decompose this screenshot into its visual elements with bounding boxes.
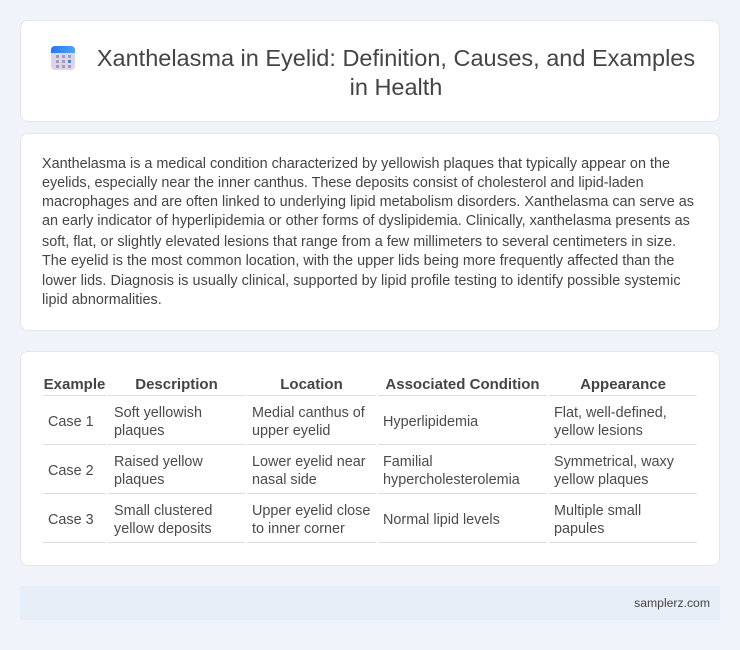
table row: case 3: Small clustered [114, 503, 212, 519]
table row: case 2: plaques [114, 472, 164, 488]
footer text: samplerz.com [634, 596, 710, 610]
heading: in Health [350, 74, 442, 100]
table row: case 1: Soft yellowish [114, 405, 202, 421]
table row: case 1: upper eyelid [252, 423, 330, 439]
footer bar [20, 586, 720, 620]
heading: Xanthelasma in Eyelid: Definition, Causes, and Examples [97, 45, 695, 71]
panel: title [20, 20, 720, 122]
text block: definition: lipid abnormalities. [42, 292, 162, 308]
table row: case 3: to inner corner [252, 521, 345, 537]
table row: case 1: Hyperlipidemia [383, 414, 478, 430]
text block: definition: lower lids. Diagnosis is usually clinical, supported by lipid profile testing to identify possible systemic [42, 273, 681, 289]
panel: examples table [20, 351, 720, 566]
text block: definition: macrophages and are often linked to underlying lipid metabolism disorders. Xanthelasma can serve as [42, 194, 694, 210]
table header: Associated Condition [385, 376, 540, 393]
table row: case 1: Flat, well-defined, [554, 405, 667, 421]
table row: case 3: papules [554, 521, 604, 537]
table row: case 1: Case 1 [48, 414, 94, 430]
table header: Appearance [580, 376, 666, 393]
table header: Location [280, 376, 343, 393]
text block: definition: Xanthelasma is a medical condition characterized by yellowish plaques that typically appear on the [42, 156, 670, 172]
table row: case 1: yellow lesions [554, 423, 643, 439]
table header: Example [44, 376, 105, 393]
table row: case 2: nasal side [252, 472, 317, 488]
text block: definition: eyelids, especially near the inner canthus. These deposits consist of cholesterol and lipid-laden [42, 175, 644, 191]
table row: case 2: Symmetrical, waxy [554, 454, 674, 470]
table row: case 2: Familial [383, 454, 433, 470]
table row: case 3: Case 3 [48, 512, 94, 528]
icon: calendar [51, 46, 75, 70]
table row: case 2: yellow plaques [554, 472, 648, 488]
text block: definition [42, 156, 694, 308]
table row: case 1: plaques [114, 423, 164, 439]
table row: case 3 [43, 503, 697, 543]
panel: definition paragraph [20, 133, 720, 331]
table row: case 1: Medial canthus of [252, 405, 365, 421]
table row: case 3: Normal lipid levels [383, 512, 500, 528]
table row: case 1 [43, 405, 697, 445]
table header: Description [135, 376, 218, 393]
table row: case 3: yellow deposits [114, 521, 212, 537]
table row: case 2: Lower eyelid near [252, 454, 366, 470]
text block: definition: soft, flat, or slightly elevated lesions that range from a few millimeters to several centimeters in size. [42, 234, 676, 250]
table header [43, 376, 697, 396]
text block: definition: The eyelid is the most common location, with the upper lids being more frequently affected than the [42, 253, 674, 269]
table row: case 2: Raised yellow [114, 454, 203, 470]
table row: case 2: hypercholesterolemia [383, 472, 520, 488]
table row: case 3: Upper eyelid close [252, 503, 370, 519]
table row: case 3: Multiple small [554, 503, 641, 519]
table row: case 2 [43, 454, 697, 494]
heading [97, 45, 695, 100]
table row: case 2: Case 2 [48, 463, 94, 479]
text block: definition: an early indicator of hyperlipidemia or other forms of dyslipidemia. Clinically, xanthelasma presents as [42, 213, 690, 229]
